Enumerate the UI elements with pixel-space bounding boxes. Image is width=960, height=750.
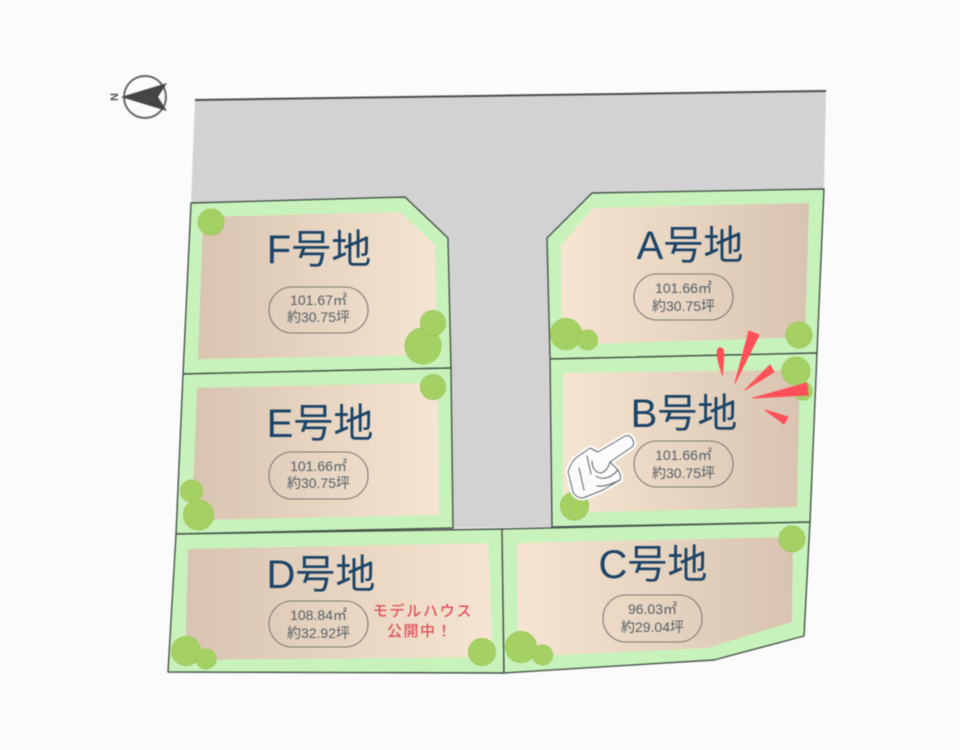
area F: 約30.75坪 [287,309,350,325]
area C: 96.03㎡ [628,601,677,617]
area C: 約29.04坪 [621,619,684,635]
trees E [180,374,446,530]
area A: 約30.75坪 [652,298,715,314]
area E [269,452,368,499]
lot A [547,189,824,359]
compass [109,76,167,118]
road [191,91,826,528]
trees F [198,209,446,364]
title D: D号地 [267,553,375,597]
lot F [183,197,451,374]
model house note: 公開中！ [387,623,453,640]
trees D [172,636,496,669]
area B [634,441,733,487]
area A [634,274,733,320]
area B: 101.66㎡ [655,447,712,463]
area C [603,595,702,642]
area E: 約30.75坪 [287,475,350,491]
model house note [373,602,473,640]
area D [269,601,368,647]
area E: 101.66㎡ [290,458,347,474]
area F [269,287,368,333]
area F: 101.67㎡ [290,292,347,308]
lot B [550,353,817,527]
area D: 約32.92坪 [287,625,350,641]
icon: pointing hand [568,435,634,498]
lot D [168,529,504,673]
trees A [550,318,812,350]
area A: 101.66㎡ [655,280,712,296]
title C: C号地 [599,543,707,587]
trees C [506,526,805,665]
title E: E号地 [267,402,373,446]
compass: N [109,93,121,101]
area B: 約30.75坪 [652,465,715,481]
area D: 108.84㎡ [290,607,347,623]
model house note: モデルハウス [373,602,473,620]
lot E [176,368,453,534]
trees B [560,357,812,520]
icon: red emphasis burst [717,331,808,424]
title B: B号地 [631,392,737,436]
title F: F号地 [267,228,371,272]
lot C [502,522,810,673]
title A: A号地 [637,224,743,268]
